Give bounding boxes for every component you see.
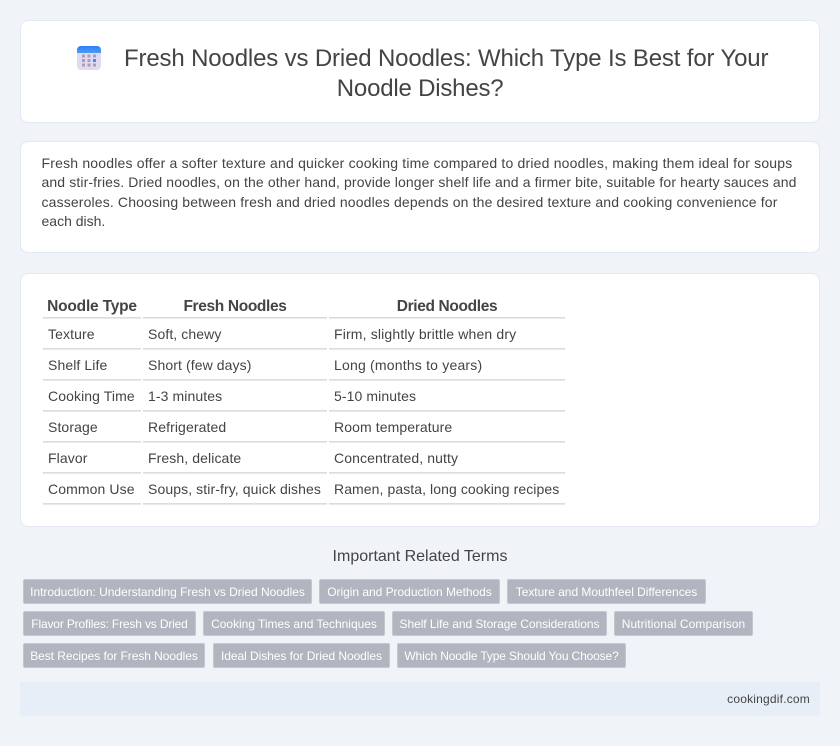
panel: comparison table: Storage [48,419,98,435]
panel: comparison table: Cooking Time [48,388,135,404]
comparison table [43,298,565,505]
related term tags: Origin and Production Methods [327,585,492,599]
related term tags [23,579,753,668]
panel: comparison table: Flavor [48,450,88,466]
panel: comparison table [20,273,820,527]
panel: comparison table: Refrigerated [148,419,226,435]
panel: comparison table: Soups, stir-fry, quick dishes [148,481,321,497]
related term tags: Introduction: Understanding Fresh vs Dried Noodles [30,585,305,599]
icon: calendar [77,46,101,70]
panel: comparison table: Fresh Noodles [183,298,287,315]
related term tags: Texture and Mouthfeel Differences [516,585,697,599]
panel: comparison table: 1-3 minutes [148,388,222,404]
related term tags: Nutritional Comparison [622,617,745,631]
panel: comparison table: 5-10 minutes [334,388,416,404]
panel: comparison table: Firm, slightly brittle when dry [334,326,516,342]
title [124,45,768,102]
panel: comparison table: Shelf Life [48,357,107,373]
panel: comparison table: Dried Noodles [397,298,497,315]
panel: comparison table: Noodle Type [47,298,137,315]
footer bar [20,682,820,716]
panel: comparison table: Short (few days) [148,357,252,373]
panel: comparison table: Long (months to years) [334,357,482,373]
panel: introduction: each dish. [42,213,105,229]
panel: introduction [20,141,820,253]
related term tags: Which Noodle Type Should You Choose? [404,649,619,663]
heading: important related terms: Important Related Terms [333,548,507,565]
panel: comparison table: Concentrated, nutty [334,450,458,466]
panel: comparison table: Common Use [48,481,135,497]
title: Fresh Noodles vs Dried Noodles: Which Type Is Best for Your [124,45,768,72]
panel: comparison table: Ramen, pasta, long cooking recipes [334,481,559,497]
related term tags: Cooking Times and Techniques [211,617,377,631]
panel: comparison table: Texture [48,326,95,342]
footer source text: cookingdif.com [727,692,810,706]
title: Noodle Dishes? [337,75,503,102]
related term tags: Best Recipes for Fresh Noodles [30,649,198,663]
panel: introduction: Fresh noodles offer a softer texture and quicker cooking time compared to dried noodles, making them ideal for soups [42,155,792,171]
panel: introduction: and stir-fries. Dried noodles, on the other hand, provide longer shelf life and a firmer bite, suitable for hearty sauces and [42,174,797,190]
panel: title card [20,20,820,123]
panel: introduction: casseroles. Choosing between fresh and dried noodles depends on the desired texture and cooking convenience for [42,194,778,210]
panel: comparison table: Room temperature [334,419,452,435]
related term tags: Shelf Life and Storage Considerations [400,617,599,631]
related term tags: Ideal Dishes for Dried Noodles [221,649,382,663]
related term tags: Flavor Profiles: Fresh vs Dried [31,617,188,631]
text block: introduction [42,155,797,229]
panel: comparison table: Soft, chewy [148,326,221,342]
panel: comparison table: Fresh, delicate [148,450,241,466]
